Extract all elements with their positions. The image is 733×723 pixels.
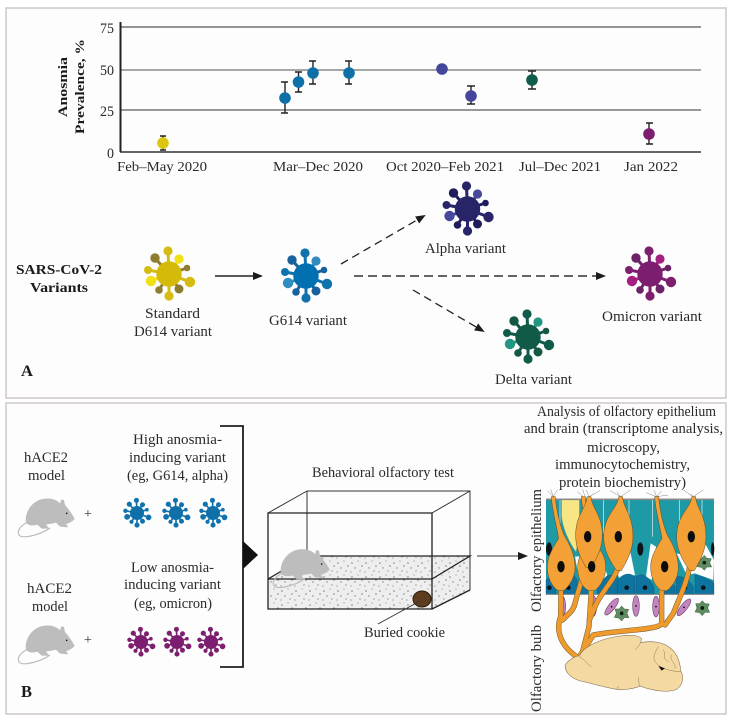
y axis tick labels bbox=[100, 21, 114, 162]
text: analysis description bbox=[524, 404, 723, 491]
error bars bbox=[160, 61, 653, 150]
y axis title: Prevalence, % bbox=[72, 39, 87, 134]
x axis period labels: Feb–May 2020 bbox=[117, 160, 207, 175]
purple basal cells bbox=[559, 596, 566, 617]
basal cells bbox=[546, 573, 714, 594]
variant names: Omicron variant bbox=[602, 309, 702, 325]
icon: mouse in cage bbox=[273, 549, 330, 587]
icon: omicron virus bbox=[625, 246, 676, 301]
x axis period labels: Jan 2022 bbox=[624, 160, 678, 175]
variant names: G614 variant bbox=[269, 313, 347, 329]
label: SARS-CoV-2 Variants bbox=[16, 263, 102, 296]
olfactory neurons bbox=[547, 497, 706, 591]
epithelium background bbox=[546, 499, 714, 594]
text: high anosmia variant bbox=[127, 432, 228, 484]
arrow: G614 to alpha bbox=[341, 216, 424, 264]
panel letter A: A bbox=[21, 363, 33, 380]
rotated label: olfactory epithelium: Olfactory epithelium bbox=[529, 488, 545, 612]
text: low anosmia variant: inducing variant bbox=[124, 577, 221, 593]
icon: buried cookie bbox=[378, 591, 431, 624]
text: analysis description: microscopy, bbox=[587, 440, 660, 456]
panel letter B: B bbox=[21, 682, 32, 701]
panel A: anosmia prevalence and variants bbox=[6, 8, 726, 398]
variant names: Alpha variant bbox=[425, 241, 506, 257]
variant names: D614 variant bbox=[134, 324, 212, 340]
variant names: Standard bbox=[145, 306, 201, 322]
icon: mouse, high group bbox=[18, 499, 75, 537]
y axis tick labels: 75 bbox=[100, 21, 114, 37]
label: buried cookie: Buried cookie bbox=[364, 625, 445, 641]
text: hACE2 model, low group bbox=[27, 581, 72, 615]
panel B: mouse experiment bbox=[6, 403, 726, 714]
arrow: test to analysis bbox=[477, 555, 526, 557]
icon: alpha virus bbox=[442, 181, 494, 236]
icon: delta virus bbox=[503, 309, 554, 364]
arrow: G614 to delta bbox=[413, 290, 483, 331]
x axis period labels: Jul–Dec 2021 bbox=[519, 160, 601, 175]
text: high anosmia variant: inducing variant bbox=[129, 450, 226, 466]
icon: mouse, low group bbox=[18, 626, 75, 664]
variant names bbox=[134, 241, 702, 388]
cilia bbox=[547, 489, 703, 497]
chart: anosmia prevalence by period bbox=[55, 21, 701, 175]
text: analysis description: immunocytochemistry, bbox=[555, 457, 690, 473]
data points bbox=[157, 63, 655, 149]
x axis period labels: Oct 2020–Feb 2021 bbox=[386, 160, 504, 175]
icon: G614 virus bbox=[281, 248, 332, 303]
plus sign: + bbox=[84, 507, 92, 522]
diagram: olfactory epithelium bbox=[546, 489, 714, 657]
icon: D614 virus bbox=[144, 246, 195, 301]
text: low anosmia variant bbox=[124, 560, 221, 612]
text: hACE2 model, high group bbox=[24, 450, 68, 484]
text: analysis description: Analysis of olfactory epithelium bbox=[537, 404, 717, 420]
text: hACE2 model, low group: model bbox=[32, 599, 68, 615]
y axis title bbox=[55, 39, 87, 134]
icons: low anosmia virus trio bbox=[127, 627, 225, 657]
label: SARS-CoV-2 Variants: SARS-CoV-2 bbox=[16, 263, 102, 278]
plus sign: + bbox=[84, 633, 92, 648]
text: low anosmia variant: Low anosmia- bbox=[131, 560, 214, 576]
text: hACE2 model, high group: hACE2 bbox=[24, 450, 68, 466]
y axis tick labels: 0 bbox=[107, 146, 114, 162]
label: SARS-CoV-2 Variants: Variants bbox=[30, 281, 89, 296]
nuclei bbox=[546, 542, 714, 590]
y axis tick labels: 50 bbox=[100, 63, 114, 79]
rotated label: olfactory bulb: Olfactory bulb bbox=[529, 625, 545, 712]
supporting cell outlines bbox=[560, 499, 702, 540]
x axis period labels: Mar–Dec 2020 bbox=[273, 160, 363, 175]
text: high anosmia variant: High anosmia- bbox=[133, 432, 222, 448]
icons: high anosmia virus trio bbox=[123, 498, 227, 528]
test cage with mouse and cookie bbox=[268, 491, 470, 624]
y axis title: Anosmia bbox=[55, 56, 70, 117]
text: low anosmia variant: (eg, omicron) bbox=[134, 596, 212, 612]
green cells bbox=[697, 555, 712, 570]
text: analysis description: and brain (transcriptome analysis, bbox=[524, 421, 723, 437]
neuron nuclei bbox=[557, 531, 695, 572]
heading: behavioral olfactory test: Behavioral olfactory test bbox=[312, 465, 454, 481]
x axis period labels bbox=[117, 160, 678, 175]
y axis tick labels: 25 bbox=[100, 104, 114, 120]
diagram: brain bbox=[565, 635, 683, 691]
arrow: D614 to G614 bbox=[215, 275, 261, 277]
text: high anosmia variant: (eg, G614, alpha) bbox=[127, 468, 228, 484]
yellow cell bbox=[562, 499, 579, 552]
arrow: G614 to omicron bbox=[354, 275, 604, 277]
text: hACE2 model, low group: hACE2 bbox=[27, 581, 72, 597]
axons bbox=[559, 560, 690, 657]
bracket with arrowhead bbox=[220, 426, 258, 667]
text: hACE2 model, high group: model bbox=[28, 468, 65, 484]
text: analysis description: protein biochemistry) bbox=[559, 475, 686, 491]
variant names: Delta variant bbox=[495, 372, 572, 388]
gaps between cells bbox=[575, 543, 714, 587]
